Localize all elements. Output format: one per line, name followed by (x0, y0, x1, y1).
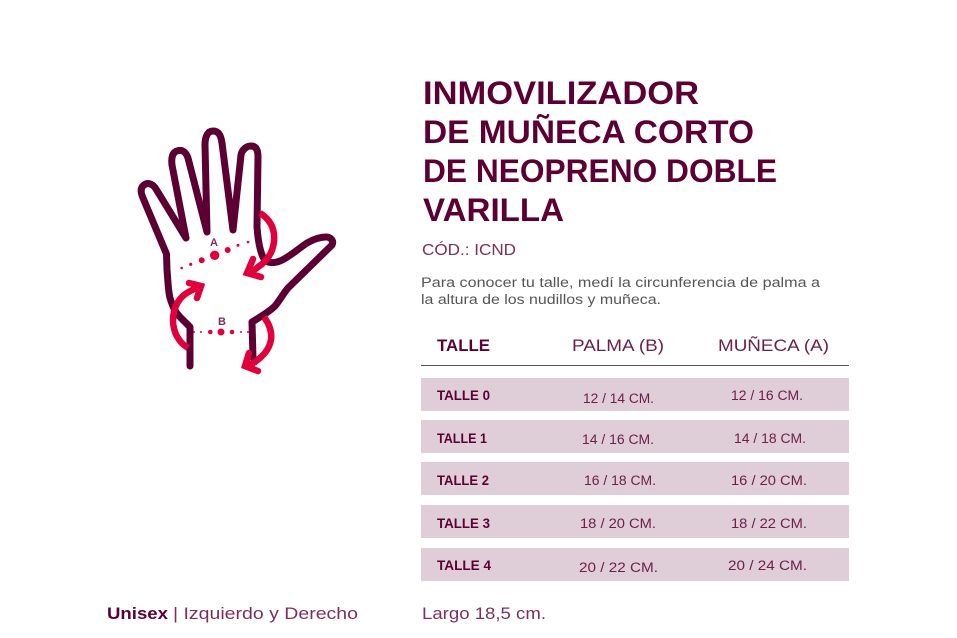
title (423, 75, 777, 228)
measure line A (180, 241, 249, 269)
footer: unisex note: Unisex (107, 604, 169, 623)
table header: PALMA (B) (572, 336, 664, 355)
row: talle 2: 16 / 18 CM. (584, 473, 656, 488)
row: talle 4: TALLE 4 (437, 558, 491, 573)
row: talle 3: 18 / 22 CM. (731, 516, 807, 531)
row: talle 2: 16 / 20 CM. (731, 473, 807, 488)
hand outline (141, 131, 333, 366)
row: talle 4 (421, 548, 849, 581)
row: talle 0: TALLE 0 (437, 388, 490, 403)
arrow: lower right (245, 317, 271, 371)
row: talle 3: TALLE 3 (437, 516, 490, 531)
title: DE NEOPRENO DOBLE (423, 153, 777, 189)
footer: length note: Largo 18,5 cm. (422, 604, 546, 623)
measure line B (193, 328, 249, 336)
row: talle 3 (421, 505, 849, 538)
label A: A (210, 237, 218, 249)
row: talle 0 (421, 378, 849, 411)
row: talle 0: 12 / 16 CM. (731, 388, 803, 403)
footer: unisex note (107, 604, 358, 623)
footer: unisex note: | Izquierdo y Derecho (173, 604, 358, 623)
title: INMOVILIZADOR (423, 75, 699, 111)
arrow: lower left (173, 283, 201, 348)
instructions text (421, 275, 821, 307)
row: talle 2 (421, 462, 849, 495)
row: talle 0: 12 / 14 CM. (583, 391, 654, 406)
size table (421, 336, 849, 581)
product code: CÓD.: ICND (422, 240, 516, 259)
row: talle 1: TALLE 1 (437, 431, 487, 446)
instructions text: la altura de los nudillos y muñeca. (421, 292, 661, 307)
row: talle 1 (421, 420, 849, 453)
label B: B (218, 316, 226, 328)
table header (421, 336, 849, 366)
row: talle 3: 18 / 20 CM. (580, 516, 656, 531)
row: talle 4: 20 / 22 CM. (579, 560, 658, 575)
hand diagram (141, 131, 333, 371)
row: talle 1: 14 / 18 CM. (734, 431, 806, 446)
row: talle 1: 14 / 16 CM. (582, 432, 654, 447)
title: VARILLA (423, 192, 564, 228)
arrow: upper right (247, 213, 274, 277)
title: DE MUÑECA CORTO (423, 113, 754, 150)
row: talle 2: TALLE 2 (437, 473, 489, 488)
row: talle 4: 20 / 24 CM. (728, 558, 807, 573)
table header: MUÑECA (A) (718, 336, 829, 355)
instructions text: Para conocer tu talle, medí la circunferencia de palma a (421, 275, 821, 290)
table header: TALLE (437, 336, 490, 355)
